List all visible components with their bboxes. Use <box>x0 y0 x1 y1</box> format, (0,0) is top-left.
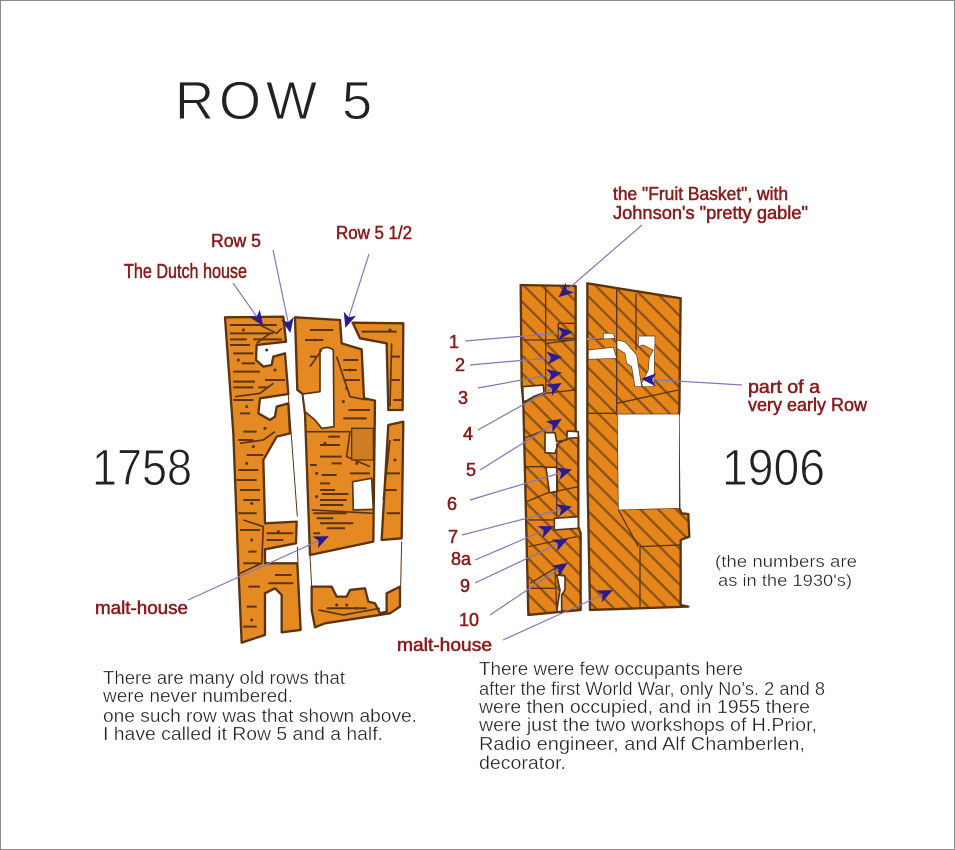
text block: 1906 description: were just the two workshops of H.Prior, <box>478 715 817 735</box>
label: Fruit Basket: Johnson's "pretty gable" <box>613 203 808 223</box>
text block: 1906 description: after the first World War, only No's. 2 and 8 <box>479 679 825 699</box>
text block: 1758 description: There are many old rows that <box>103 668 345 688</box>
house numbers: 4 <box>463 424 473 444</box>
text block: 1758 description: were never numbered. <box>102 686 293 706</box>
label: part of a very early Row: very early Row <box>748 395 868 415</box>
text block: 1906 description: were then occupied, and in 1955 there <box>478 697 810 717</box>
label: part of a very early Row: part of a <box>748 377 821 397</box>
text block: 1906 description: Radio engineer, and Alf Chamberlen, <box>479 734 805 754</box>
house numbers <box>447 332 479 630</box>
title: ROW 5 <box>175 71 372 131</box>
label: Row 5 1/2: Row 5 1/2 <box>336 223 412 243</box>
house numbers: 7 <box>448 527 458 547</box>
note: numbering: as in the 1930's) <box>718 571 852 590</box>
house numbers: 9 <box>460 576 470 596</box>
note: numbering: (the numbers are <box>715 552 857 571</box>
arrows: 1758 labels <box>188 250 369 600</box>
label: Row 5: Row 5 <box>211 231 261 251</box>
label: malt-house 1906: malt-house <box>397 635 492 655</box>
house numbers: 1 <box>449 332 459 352</box>
text block: 1758 description: I have called it Row 5 and a half. <box>103 724 383 744</box>
house numbers: 5 <box>466 460 476 480</box>
text block: 1906 description <box>478 659 825 773</box>
house numbers: 8a <box>451 549 472 569</box>
house numbers: 2 <box>455 355 465 375</box>
house numbers: 10 <box>459 610 479 630</box>
label: The Dutch house: The Dutch house <box>124 261 247 283</box>
label: malt-house 1758: malt-house <box>95 598 188 618</box>
text block: 1758 description <box>102 668 417 744</box>
label: Fruit Basket: the "Fruit Basket", with <box>613 184 788 204</box>
text block: 1906 description: There were few occupants here <box>479 659 743 679</box>
year 1906: 1906 <box>722 439 825 496</box>
map: 1758 plan <box>225 317 403 643</box>
map: 1906 plan <box>521 283 689 615</box>
text block: 1906 description: decorator. <box>479 753 566 773</box>
note: numbering <box>715 552 857 590</box>
year 1758: 1758 <box>92 439 192 496</box>
house numbers: 6 <box>447 494 457 514</box>
arrows: 1906 labels <box>462 225 742 640</box>
house numbers: 3 <box>458 388 468 408</box>
label: Fruit Basket <box>613 184 808 223</box>
text block: 1758 description: one such row was that shown above. <box>103 706 417 726</box>
label: part of a very early Row <box>748 377 868 415</box>
